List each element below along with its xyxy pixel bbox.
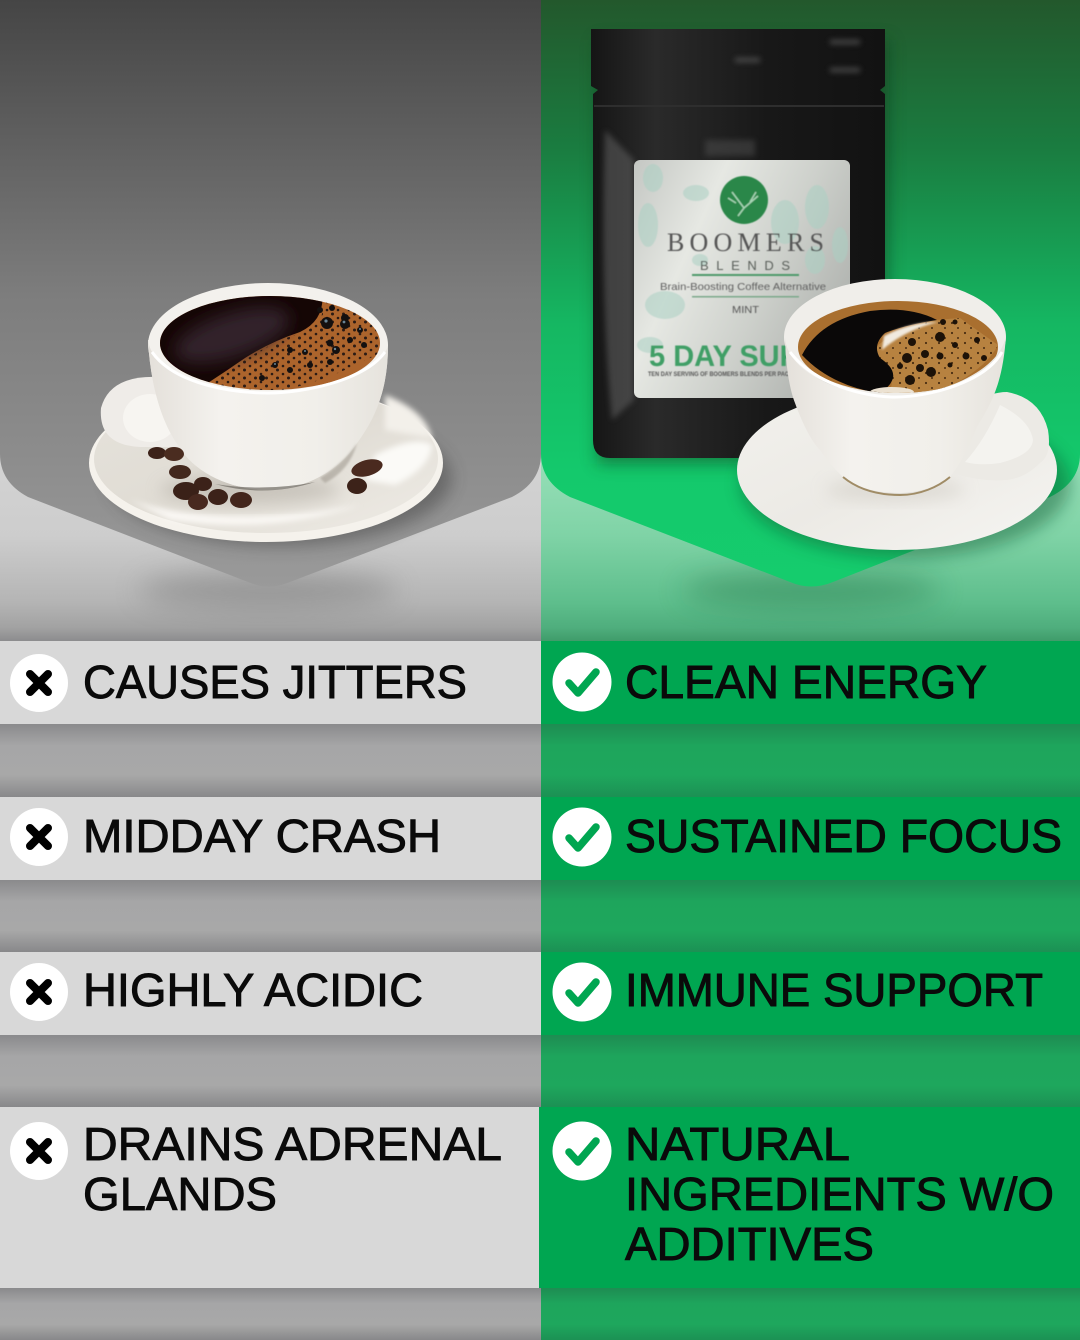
row 1: clean energy: [541, 641, 1080, 724]
row 4: drains adrenal glands: GLANDS: [83, 1168, 277, 1220]
row 1: causes jitters: CAUSES JITTERS: [83, 656, 467, 708]
icon: check mark: [552, 808, 612, 866]
cup handle: [953, 392, 1049, 480]
cup bowl front: [785, 335, 1006, 493]
product label artwork: BOOMERS: [667, 228, 824, 257]
row 3: highly acidic: HIGHLY ACIDIC: [83, 964, 423, 1016]
row 4: natural ingredients without additives: INGREDIENTS W/O: [625, 1168, 1054, 1220]
product label artwork: TEN DAY SERVING OF BOOMERS BLENDS PER PACK: [648, 371, 793, 378]
product label artwork: MINT: [732, 305, 759, 316]
row 4: drains adrenal glands: DRAINS ADRENAL: [83, 1118, 502, 1170]
row 4: natural ingredients without additives: [539, 1107, 1080, 1288]
panel: boomers side background: [541, 456, 1080, 1340]
image: boomers blends product bag: [591, 29, 889, 464]
shape: green pointed header: [541, 0, 1080, 586]
row 3: immune support: IMMUNE SUPPORT: [625, 964, 1043, 1016]
icon: check mark: [552, 1122, 612, 1180]
row 1: clean energy: CLEAN ENERGY: [625, 656, 987, 708]
row 1: causes jitters: [0, 641, 541, 724]
icon: check mark: [552, 962, 612, 1022]
row 3: highly acidic: [0, 952, 541, 1035]
product label artwork: [637, 164, 848, 378]
icon: x mark: [10, 808, 68, 866]
row 4: natural ingredients without additives: NATURAL: [625, 1118, 850, 1170]
row 2: sustained focus: SUSTAINED FOCUS: [625, 810, 1062, 862]
icon: x mark: [10, 963, 68, 1021]
icon: x mark: [10, 1122, 68, 1180]
panel: coffee side background: [0, 456, 541, 1336]
row 3: immune support: [541, 952, 1080, 1035]
row 2: sustained focus: [541, 797, 1080, 880]
row 2: midday crash: [0, 797, 541, 880]
row 4: drains adrenal glands: [0, 1107, 540, 1288]
cup handle: [101, 377, 182, 447]
product label artwork: 5 DAY SUP: [649, 340, 799, 373]
product label artwork: Brain-Boosting Coffee Alternative: [660, 281, 826, 293]
image: coffee cup on saucer with beans: [89, 283, 452, 546]
row 4: natural ingredients without additives: ADDITIVES: [625, 1218, 874, 1270]
cup bowl front: [148, 340, 388, 490]
product label artwork: BLENDS: [700, 258, 790, 273]
shape: grey pointed header: [0, 0, 541, 586]
cup bowl back: [784, 279, 1006, 395]
coffee beans: [148, 447, 385, 510]
row 2: midday crash: MIDDAY CRASH: [83, 810, 441, 862]
icon: check mark: [552, 652, 612, 712]
icon: x mark: [10, 654, 68, 712]
image: coffee cup on saucer beside bag: [737, 279, 1070, 558]
